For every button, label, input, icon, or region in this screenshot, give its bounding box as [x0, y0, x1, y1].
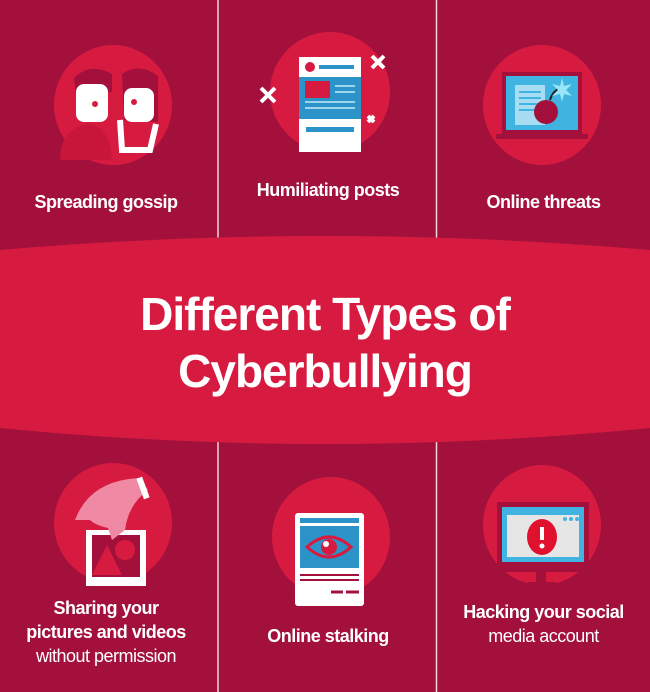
label: hacking [463, 602, 624, 646]
icon: humiliating posts [261, 32, 390, 152]
icon: online threats [483, 45, 601, 165]
label: online threats: Online threats [486, 192, 601, 212]
icon: hacking [483, 465, 601, 586]
label: hacking: Hacking your social [463, 602, 624, 622]
title [140, 288, 511, 397]
title: Cyberbullying [178, 345, 472, 397]
label: hacking: media account [488, 626, 599, 646]
label: humiliating posts: Humiliating posts [257, 180, 399, 200]
title: Different Types of [140, 288, 510, 340]
label: online stalking: Online stalking [267, 626, 389, 646]
icon: online stalking [272, 477, 390, 606]
label: sharing pictures [26, 598, 186, 666]
label: sharing pictures: without permission [36, 646, 176, 666]
title band [0, 236, 650, 444]
icon: sharing pictures [54, 463, 172, 586]
icon: gossip [54, 45, 172, 165]
label: sharing pictures: Sharing your [53, 598, 158, 618]
label: sharing pictures: pictures and videos [26, 622, 186, 642]
label: spreading gossip: Spreading gossip [34, 192, 178, 212]
